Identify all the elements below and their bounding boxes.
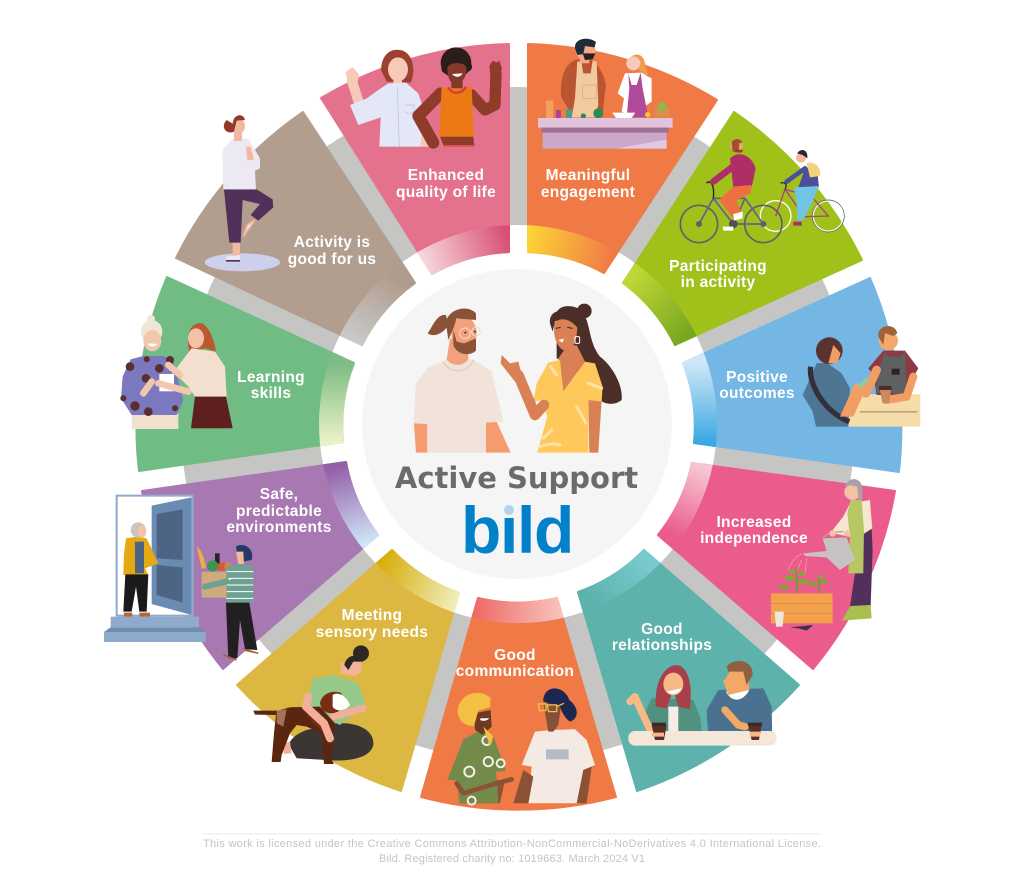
gradient band — [319, 352, 355, 446]
footer licence text: This work is licensed under the Creative Commons Attribution-NonCommercial-NoDerivatives 4.0 International License. — [203, 838, 821, 850]
illustration: two friends with coffee — [628, 661, 777, 746]
gradient band — [622, 263, 696, 346]
label: communication — [456, 663, 574, 680]
centre circle — [362, 269, 672, 579]
gradient band — [417, 225, 510, 275]
illustration: two people cooking at counter — [538, 39, 673, 149]
panel: Meeting sensory needs — [237, 550, 459, 791]
panel: Good communication — [421, 598, 616, 810]
gradient band — [471, 597, 564, 624]
label: skills — [251, 385, 291, 402]
segment shape — [136, 277, 354, 471]
panel: Participating in activity — [623, 112, 862, 345]
footer licence text: Bild. Registered charity no: 1019663. March 2024 V1 — [379, 853, 645, 865]
label: quality of life — [396, 184, 496, 201]
illustration: two women waving — [345, 47, 502, 147]
segment shape — [237, 550, 459, 791]
panel: Good relationships — [578, 550, 799, 791]
illustration: woman hugging dog — [253, 645, 373, 764]
gradient band — [657, 462, 713, 549]
gradient band — [527, 225, 618, 274]
label: in activity — [681, 274, 755, 291]
illustration: neighbour delivering groceries — [104, 496, 258, 660]
label: good for us — [288, 251, 376, 268]
segment shape — [623, 112, 862, 345]
label: Enhanced — [408, 167, 484, 184]
gradient band — [340, 262, 416, 346]
label: sensory needs — [316, 624, 428, 641]
gradient band — [577, 549, 660, 612]
label: Meaningful — [546, 167, 630, 184]
gradient band — [376, 549, 460, 612]
label: outcomes — [719, 385, 795, 402]
panel: Enhanced quality of life — [321, 44, 509, 274]
panel: Learning skills — [120, 277, 354, 471]
label: Safe, — [260, 486, 298, 503]
illustration: customer paying barista — [803, 326, 920, 427]
footer licence text — [203, 834, 821, 865]
label: relationships — [612, 637, 712, 654]
panel: Increased independence — [658, 463, 895, 669]
segment shape — [421, 598, 616, 810]
label: Good — [494, 647, 536, 664]
segment shape — [683, 278, 901, 472]
label: environments — [226, 519, 332, 536]
illustration: two cyclists — [680, 139, 844, 243]
segment shape — [321, 44, 509, 274]
label: Participating — [669, 258, 767, 275]
panel: Safe, predictable environments — [104, 462, 378, 669]
segment shape — [578, 550, 799, 791]
label: Meeting — [342, 607, 402, 624]
gradient band — [682, 352, 717, 447]
panel: Meaningful engagement — [528, 39, 717, 273]
segment shape — [658, 463, 895, 669]
label: Increased — [716, 514, 792, 531]
label: Good — [641, 621, 683, 638]
title: Active Support — [395, 461, 638, 495]
panel: Activity is good for us — [176, 112, 415, 345]
label: predictable — [236, 503, 322, 520]
label: Positive — [726, 369, 788, 386]
illustration: two women talking — [447, 688, 595, 805]
label: Learning — [237, 369, 305, 386]
illustration: man and woman talking — [413, 304, 622, 453]
illustration: two women with a mug — [120, 315, 233, 429]
segment shape — [528, 44, 717, 273]
illustration: woman in tree pose — [205, 115, 280, 271]
circle background — [362, 269, 672, 579]
logo: bild: bild — [461, 493, 574, 567]
panel: Positive outcomes — [683, 278, 920, 472]
label: engagement — [541, 184, 635, 201]
gradient band — [323, 461, 379, 549]
segment shape — [176, 112, 415, 345]
segment shape — [142, 462, 378, 669]
infographic wheel — [104, 38, 920, 864]
label: independence — [700, 530, 808, 547]
illustration: woman watering plants — [771, 479, 873, 631]
grey ring behind segments — [250, 156, 786, 692]
label: Activity is — [294, 234, 370, 251]
